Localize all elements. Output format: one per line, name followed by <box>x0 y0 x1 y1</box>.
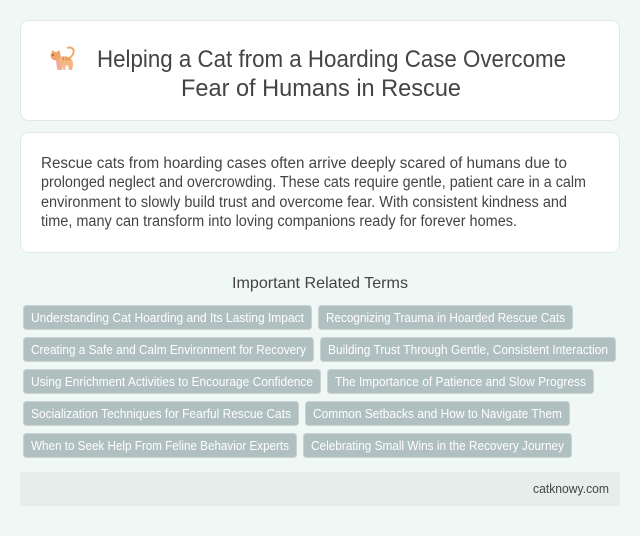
tag: Recognizing Trauma in Hoarded Rescue Cats <box>326 311 565 325</box>
tag: Common Setbacks and How to Navigate Them <box>313 407 562 421</box>
icon: cat <box>50 48 74 70</box>
tag <box>320 338 616 362</box>
tag: Celebrating Small Wins in the Recovery Journey <box>311 439 565 453</box>
panel: description: prolonged neglect and overcrowding. These cats require gentle, patient care in a calm <box>41 174 586 191</box>
tag <box>328 370 594 394</box>
tag <box>24 402 298 426</box>
tag <box>24 434 296 458</box>
title text <box>97 46 566 102</box>
panel: description: time, many can transform into loving companions ready for forever homes. <box>41 213 517 230</box>
tag <box>318 306 572 330</box>
tag <box>24 306 312 330</box>
tag <box>24 338 314 362</box>
tag <box>306 402 570 426</box>
footer <box>20 472 620 506</box>
tag list <box>24 306 616 458</box>
tag <box>304 434 572 458</box>
footer: catknowy.com <box>533 482 609 496</box>
title text: Fear of Humans in Rescue <box>181 75 461 102</box>
tag: Socialization Techniques for Fearful Rescue Cats <box>31 407 291 421</box>
title text: Helping a Cat from a Hoarding Case Overcome <box>97 46 566 73</box>
tag: Understanding Cat Hoarding and Its Lasting Impact <box>31 311 304 325</box>
panel: title card <box>20 20 620 120</box>
tag <box>24 370 320 394</box>
tag: The Importance of Patience and Slow Progress <box>335 375 586 389</box>
tag: Creating a Safe and Calm Environment for Recovery <box>31 343 307 357</box>
panel: description: environment to slowly build trust and overcome fear. With consistent kindness and <box>41 194 567 211</box>
tag: Using Enrichment Activities to Encourage Confidence <box>31 375 313 389</box>
tag: Building Trust Through Gentle, Consistent Interaction <box>328 343 608 357</box>
heading: related terms: Important Related Terms <box>232 275 408 292</box>
tag: When to Seek Help From Feline Behavior Experts <box>31 439 289 453</box>
panel: description <box>20 132 620 252</box>
panel: description: Rescue cats from hoarding cases often arrive deeply scared of humans due to <box>41 155 567 172</box>
